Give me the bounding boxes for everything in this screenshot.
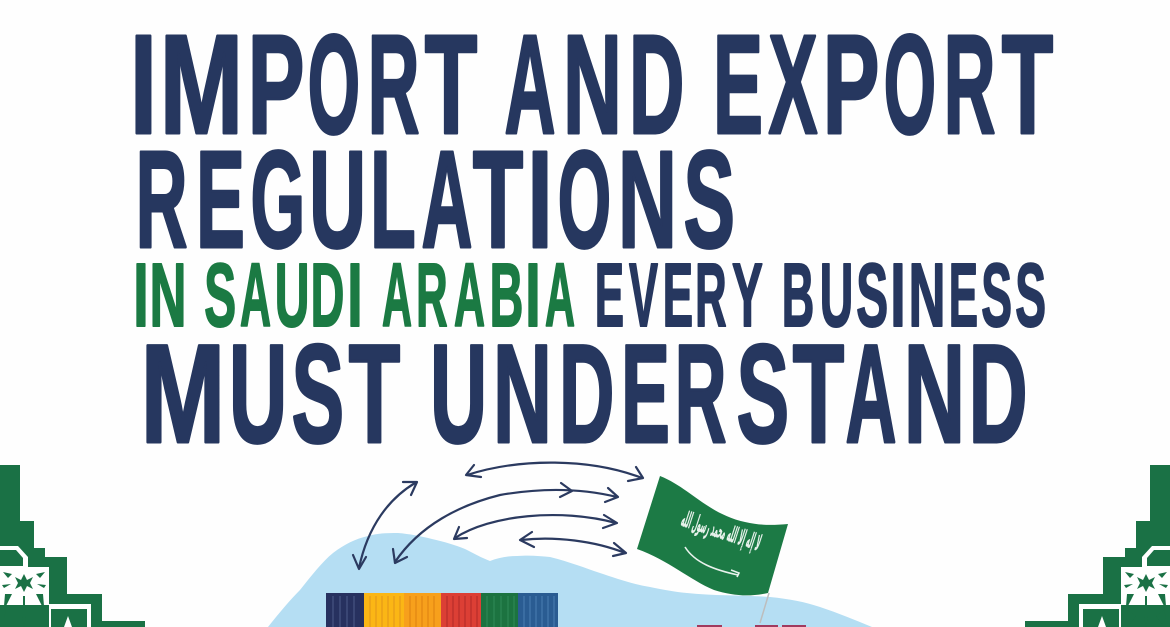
title line 4: A <box>846 315 896 472</box>
navy phrase: E <box>663 246 693 346</box>
arrow 2 <box>466 463 643 481</box>
title line 4: R <box>675 315 726 472</box>
shipping containers <box>326 593 558 627</box>
navy phrase: S <box>856 246 888 346</box>
title <box>130 5 1053 472</box>
navy phrase: S <box>981 246 1012 346</box>
light blue hill <box>268 533 872 627</box>
flag sword <box>685 547 739 577</box>
green phrase: B <box>490 246 523 346</box>
green phrase: A <box>240 246 271 346</box>
title line 1: D <box>629 5 684 163</box>
title line 2: G <box>250 123 305 277</box>
green phrase: I <box>133 246 149 346</box>
green phrase: D <box>311 246 344 346</box>
title line 3: green and navy: A <box>545 246 575 346</box>
title line 1: R <box>368 5 420 163</box>
title line 2: S <box>684 123 735 277</box>
navy phrase: N <box>909 246 945 346</box>
navy phrase: B <box>782 246 814 346</box>
arrow 3 <box>393 483 618 563</box>
title line 4: U <box>229 315 287 472</box>
green phrase: U <box>275 246 309 346</box>
green phrase: I <box>525 246 541 346</box>
title line 2: N <box>618 123 677 277</box>
green phrase: R <box>416 246 448 346</box>
navy phrase: S <box>1015 246 1046 346</box>
navy phrase: I <box>890 246 906 346</box>
green phrase: I <box>347 246 363 346</box>
green phrase: S <box>204 246 236 346</box>
navy phrase: Y <box>732 246 762 346</box>
right corner ornament <box>1025 465 1170 627</box>
title line 4: T <box>349 315 400 472</box>
title line 1: A <box>504 5 556 163</box>
title line 1: M <box>160 5 243 163</box>
navy phrase: R <box>695 246 727 346</box>
title line 2: O <box>558 123 611 277</box>
title line 4: S <box>292 315 344 472</box>
navy phrase: U <box>820 246 853 346</box>
title line 1: P <box>823 5 879 163</box>
arrow 5 <box>520 532 626 556</box>
title line 1: R <box>944 5 996 163</box>
maroon building tops <box>697 625 806 627</box>
text: لا إله إلا الله محمد رسول الله <box>678 507 764 556</box>
title line 4: U <box>430 315 487 472</box>
title line 4: D <box>969 315 1028 472</box>
title line 2: L <box>370 123 416 277</box>
title line 4: D <box>559 315 614 472</box>
navy phrase: E <box>949 246 978 346</box>
title line 1: O <box>884 5 936 163</box>
trade arrows <box>353 463 643 569</box>
title line 2: R <box>136 123 188 277</box>
title line 4: N <box>904 315 965 472</box>
title line 2: U <box>309 123 366 277</box>
title line 2: T <box>473 123 523 277</box>
title line 1: I <box>130 5 157 163</box>
title line 2: A <box>422 123 472 277</box>
Saudi flag <box>637 476 788 595</box>
left corner ornament <box>0 465 145 627</box>
title line 1: N <box>563 5 622 163</box>
flag pole <box>760 593 769 623</box>
green phrase: N <box>150 246 186 346</box>
title line 1: T <box>425 5 477 163</box>
navy phrase: E <box>595 246 624 346</box>
title line 1: O <box>308 5 360 163</box>
navy phrase: V <box>629 246 658 346</box>
title line 2: E <box>196 123 245 277</box>
title line 3: green and navy <box>133 246 1046 346</box>
title line 4: E <box>621 315 670 472</box>
title line 1: X <box>768 5 818 163</box>
title line 1: P <box>248 5 304 163</box>
title line 1: E <box>713 5 763 163</box>
title line 1: T <box>1002 5 1053 163</box>
title line 4: M <box>141 315 225 472</box>
title line 4: T <box>793 315 844 472</box>
arrow 4 <box>454 515 617 539</box>
title line 2: I <box>528 123 552 277</box>
title line 4: S <box>737 315 789 472</box>
green phrase: A <box>382 246 412 346</box>
green phrase: A <box>454 246 485 346</box>
arrow 1 <box>353 482 417 569</box>
title line 4: N <box>493 315 552 472</box>
